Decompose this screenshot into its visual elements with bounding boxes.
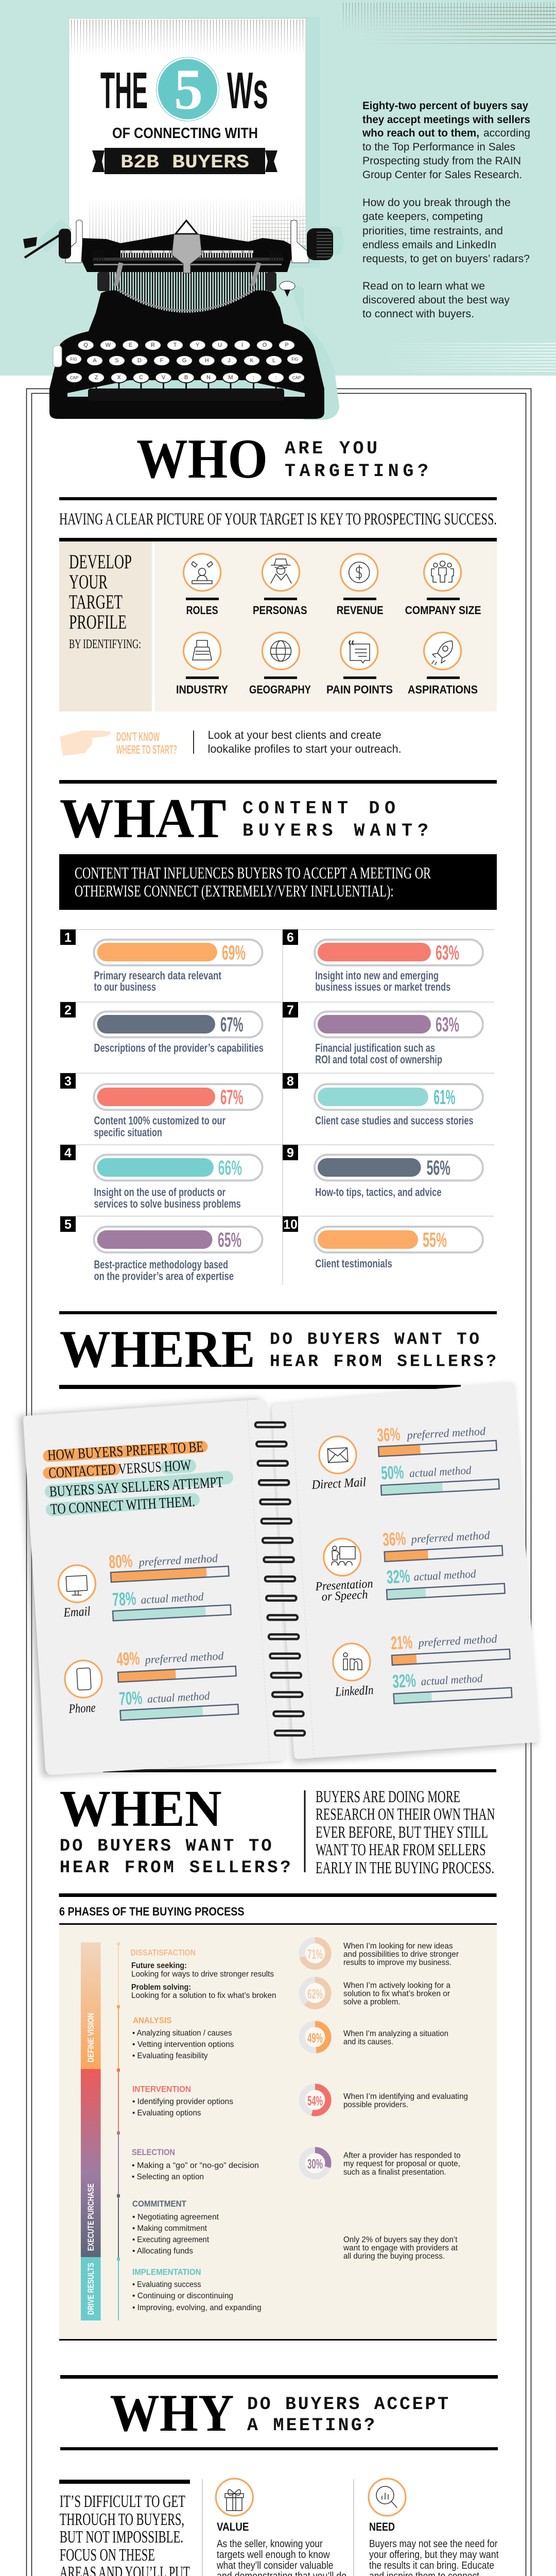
- icon: aspirations: [424, 633, 461, 670]
- statement text: FOCUS ON THESE: [60, 2546, 155, 2565]
- phase: dissatisfaction: Future seeking:: [131, 1961, 187, 1970]
- title ribbon: B2B buyers: [92, 148, 277, 174]
- item 9: 9: [287, 1146, 294, 1160]
- stage band: execute purchase: EXECUTE PURCHASE: [86, 2183, 96, 2251]
- method: direct mail: actual method: [409, 1464, 472, 1480]
- item 1: to our business: [94, 980, 156, 993]
- donut text: 54%: When I’m identifying and evaluating: [343, 2092, 468, 2101]
- donut: 54%: 54%: [307, 2093, 323, 2108]
- typewriter keys row 3: X: [117, 375, 121, 381]
- phase: intervention: [132, 2085, 233, 2117]
- panel: develop your target profile: TARGET: [69, 591, 123, 613]
- phase: dissatisfaction: [131, 1948, 276, 2000]
- donut: 30%: 30%: [307, 2156, 323, 2172]
- spiral binding: [255, 1422, 305, 1735]
- donut: 49%: [302, 2024, 328, 2050]
- icon: monitor: [66, 1575, 88, 1595]
- phase: implementation: IMPLEMENTATION: [132, 2268, 201, 2277]
- panel: develop your target profile: DEVELOP: [69, 551, 132, 573]
- typewriter keys row 1: T: [173, 342, 177, 348]
- callout heading: don't know where to start: DON'T KNOW: [116, 730, 160, 744]
- item 4: 4: [64, 1146, 72, 1160]
- item 2: 2: [64, 1003, 72, 1018]
- typewriter keys row 1: I: [241, 342, 243, 348]
- method: phone: Phone: [68, 1701, 96, 1716]
- typewriter keys row 2: F: [160, 358, 164, 364]
- title: number 5 in oval: 5: [174, 58, 203, 122]
- typewriter keys row 2: L: [272, 358, 275, 364]
- item 8: Client case studies and success stories: [315, 1114, 474, 1127]
- method: presentation or speech: actual method: [413, 1567, 477, 1583]
- donut: 49%: 49%: [307, 2030, 323, 2045]
- method: linkedin: actual method: [421, 1672, 483, 1688]
- phase: selection: • Making a “go” or “no-go” decision: [132, 2161, 259, 2170]
- intro statement: BUYERS ARE DOING MORE: [316, 1788, 460, 1806]
- typewriter keys row 3: N: [206, 375, 211, 381]
- method: direct mail: 36%: [376, 1423, 401, 1446]
- typewriter illustration: [23, 219, 344, 420]
- header hatching top right: [342, 3, 556, 374]
- reason: need: your offering, but they may want: [369, 2549, 499, 2561]
- label: geography: GEOGRAPHY: [249, 683, 311, 696]
- typewriter keys row 1: U: [218, 342, 222, 348]
- intro text: How do you break through the: [362, 196, 511, 209]
- typewriter paper with title: THE: [100, 62, 148, 120]
- note: only 2%: all during the buying process.: [343, 2252, 445, 2261]
- donut text: 62%: solution to fix what’s broken or: [343, 1990, 450, 1998]
- phase: commitment: • Negotiating agreement: [132, 2213, 219, 2222]
- typewriter keys row 1: O: [263, 342, 267, 348]
- heading: WHERE: WHERE: [60, 1320, 255, 1379]
- subheading: content do buyers want: CONTENT DO: [242, 799, 395, 819]
- callout text: [208, 728, 402, 755]
- notebook headline with highlights: CONTACTED VERSUS HOW: [48, 1457, 192, 1481]
- reason: need: Buyers may not see the need for: [369, 2538, 498, 2550]
- phase: commitment: • Allocating funds: [132, 2247, 193, 2256]
- item 5: Best-practice methodology based: [94, 1258, 228, 1271]
- method: presentation or speech: 36%: [382, 1528, 406, 1550]
- icon: magnifier: [376, 2486, 397, 2507]
- item 5: [60, 1216, 263, 1282]
- item 2: 67%: [220, 1013, 243, 1036]
- item 3: 3: [64, 1074, 72, 1089]
- phase: intervention: • Evaluating options: [132, 2109, 201, 2117]
- method: phone: 49%: [116, 1648, 140, 1670]
- donut text: 62%: When I’m actively looking for a: [343, 1981, 450, 1990]
- intro text: priorities, time restraints, and: [362, 225, 503, 237]
- frame border: [27, 388, 531, 2576]
- item 4: [60, 1145, 263, 1210]
- phase: analysis: ANALYSIS: [133, 2016, 171, 2025]
- icon: revenue: [341, 554, 378, 591]
- typewriter keys row 1: [78, 340, 295, 350]
- stage band: execute purchase: [81, 2069, 101, 2257]
- donut text: 49%: and its causes.: [343, 2038, 393, 2046]
- typewriter keys row 3: :: [275, 375, 277, 381]
- subheading: do buyers want to hear from sellers: DO BUYERS WANT TO: [270, 1330, 479, 1349]
- icon: gift: [225, 2489, 244, 2511]
- item 3: 67%: [220, 1086, 243, 1109]
- phase: commitment: COMMITMENT: [132, 2199, 186, 2209]
- item 4: services to solve business problems: [94, 1197, 241, 1210]
- reason: value: [216, 2479, 346, 2576]
- method: presentation or speech: 32%: [386, 1565, 410, 1587]
- typewriter keys row 3: Z: [95, 375, 98, 381]
- notebook headline with highlights: [47, 1438, 227, 1518]
- stage band: drive results: [81, 2257, 101, 2320]
- method: linkedin: preferred method: [417, 1632, 498, 1649]
- phase: commitment: [132, 2199, 219, 2256]
- item 8: 61%: [433, 1086, 455, 1109]
- donut text: 49%: When I’m analyzing a situation: [343, 2029, 448, 2038]
- subheading: do buyers want to hear from sellers: [60, 1837, 291, 1878]
- intro text: discovered about the best way: [362, 294, 510, 306]
- typewriter keys row 2: G: [182, 358, 186, 364]
- typewriter keys row 2: D: [137, 358, 142, 364]
- label: personas: PERSONAS: [253, 604, 307, 617]
- background: header teal: [0, 0, 556, 376]
- intro text: requests, to get on buyers’ radars?: [362, 252, 530, 265]
- donut text: 30%: [343, 2151, 461, 2177]
- icon: personas: [263, 554, 300, 591]
- reason: value: As the seller, knowing your: [217, 2538, 323, 2550]
- callout heading: don't know where to start: WHERE TO START?: [116, 743, 177, 757]
- intro text: endless emails and LinkedIn: [362, 239, 496, 251]
- icon: industry: [184, 633, 221, 670]
- notebook headline with highlights: BUYERS SAY SELLERS ATTEMPT: [49, 1474, 224, 1500]
- phase: commitment: • Executing agreement: [132, 2235, 210, 2244]
- statement text: BUT NOT IMPOSSIBLE.: [60, 2528, 183, 2547]
- typewriter keys row 2: FIG: [291, 357, 299, 362]
- callout heading: don't know where to start: [116, 730, 177, 757]
- method: email: 80%: [108, 1550, 133, 1572]
- subheading: do buyers accept a meeting: A MEETING?: [247, 2415, 375, 2436]
- item 9: How-to tips, tactics, and advice: [315, 1186, 442, 1199]
- typewriter keys row 2: FIG: [70, 357, 77, 362]
- panel: develop your target profile: PROFILE: [69, 611, 127, 633]
- notebook: [19, 1382, 539, 1776]
- typewriter keys row 1: Y: [196, 342, 200, 348]
- donut text: 30%: After a provider has responded to: [343, 2151, 461, 2160]
- icon: in logo: [343, 1653, 362, 1670]
- panel: develop your target profile: BY IDENTIFYING:: [69, 637, 141, 651]
- intro text: Read on to learn what we: [362, 280, 485, 292]
- intro text: who reach out to them,: [362, 127, 479, 139]
- typewriter keys row 3: M: [228, 375, 233, 381]
- typewriter keys row 3: ;: [253, 375, 254, 381]
- donut text: 30%: my request for proposal or quote,: [343, 2160, 460, 2168]
- icon: roles: [184, 554, 221, 591]
- icon: pain points: [341, 633, 378, 670]
- typewriter keys row 2: [65, 354, 303, 366]
- donut: 71%: 71%: [307, 1946, 323, 1962]
- method: linkedin: LinkedIn: [335, 1683, 374, 1699]
- panel: develop your target profile: [59, 541, 497, 711]
- callout text: Look at your best clients and create: [208, 728, 381, 741]
- item 7: [283, 1002, 483, 1066]
- donut: 54%: [302, 2087, 328, 2113]
- donut: 62%: 62%: [307, 1986, 323, 2002]
- subheading: are you targeting: TARGETING?: [285, 461, 428, 482]
- typewriter scale numbers: 00 10 20 30 40 50 60: [123, 249, 251, 255]
- icon: geography: [263, 633, 300, 670]
- donut: 62%: [302, 1980, 328, 2006]
- method: presentation or speech: or Speech: [321, 1588, 368, 1604]
- black banner: OTHERWISE CONNECT (EXTREMELY/VERY INFLUENTIAL):: [75, 882, 394, 900]
- typewriter keys row 1: Q: [83, 342, 88, 348]
- typewriter keys row 3: [66, 372, 305, 388]
- donut text: 62%: [343, 1981, 450, 2007]
- method: direct mail: Direct Mail: [311, 1476, 367, 1492]
- subheading: do buyers want to hear from sellers: HEAR FROM SELLERS?: [60, 1858, 291, 1878]
- intro text: Eighty-two percent of buyers say: [362, 99, 528, 112]
- item 6: business issues or market trends: [315, 980, 450, 993]
- note: only 2%: want to engage with providers at: [343, 2244, 458, 2252]
- heading: WHAT: WHAT: [60, 787, 227, 850]
- subheading: do buyers want to hear from sellers: [270, 1330, 496, 1371]
- subheading: are you targeting: [285, 438, 428, 482]
- method: email: preferred method: [137, 1552, 219, 1569]
- label: roles: ROLES: [186, 604, 218, 617]
- WHEN section: [59, 1780, 497, 2341]
- item 10: Client testimonials: [315, 1257, 392, 1270]
- phases heading: 6 PHASES OF THE BUYING PROCESS: [59, 1905, 245, 1918]
- subheading: content do buyers want: BUYERS WANT?: [242, 821, 428, 841]
- reason: need: [369, 2479, 499, 2576]
- method: presentation or speech: preferred method: [410, 1529, 491, 1546]
- phase: analysis: [132, 2016, 234, 2060]
- item 9: 56%: [427, 1157, 450, 1179]
- item 5: on the provider’s area of expertise: [94, 1269, 234, 1282]
- item 1: 1: [64, 930, 72, 945]
- item 1: Primary research data relevant: [94, 969, 222, 982]
- item 8: 8: [287, 1074, 294, 1089]
- label: pain points: PAIN POINTS: [326, 683, 393, 696]
- method: phone: preferred method: [144, 1649, 224, 1666]
- item 2: Descriptions of the provider’s capabilities: [94, 1042, 264, 1055]
- method: email: actual method: [141, 1590, 204, 1606]
- item 6: 63%: [436, 942, 459, 964]
- donut text: 71%: [343, 1942, 459, 1967]
- donut text: 54%: [343, 2092, 468, 2109]
- subheading: content do buyers want: [242, 799, 428, 841]
- title ribbon: B2B buyers: B2B BUYERS: [120, 152, 249, 174]
- phase: intervention: INTERVENTION: [132, 2085, 191, 2094]
- item 7: Financial justification such as: [315, 1042, 435, 1055]
- black banner: [59, 854, 497, 910]
- WHAT section: [59, 787, 497, 1314]
- phase: implementation: • Continuing or discontinuing: [132, 2292, 233, 2300]
- title: of connecting with: OF CONNECTING WITH: [112, 125, 258, 142]
- method: email: Email: [63, 1604, 91, 1620]
- donut text: 49%: [343, 2029, 448, 2046]
- intro text: to the Top Performance in Sales: [362, 141, 515, 153]
- donut text: 62%: solve a problem.: [343, 1998, 401, 2007]
- method: linkedin: 21%: [390, 1631, 413, 1653]
- reason: value: what they’ll consider valuable: [216, 2560, 334, 2571]
- phase: implementation: • Improving, evolving, and expanding: [132, 2303, 262, 2312]
- subheading: do buyers accept a meeting: DO BUYERS ACCEPT: [247, 2394, 448, 2415]
- typewriter keys row 3: CAP: [70, 376, 78, 380]
- phase: dissatisfaction: Looking for ways to drive stronger results: [131, 1970, 274, 1978]
- intro text: [362, 99, 530, 320]
- phase: commitment: • Making commitment: [132, 2224, 207, 2233]
- stage band: define vision: [81, 1942, 101, 2069]
- icon: presenter: [332, 1546, 355, 1565]
- phase: dissatisfaction: Problem solving:: [131, 1983, 191, 1992]
- panel: develop your target profile: YOUR: [69, 571, 108, 593]
- icon: company size: [424, 554, 461, 591]
- timeline: [117, 1942, 120, 2320]
- icon: pointing hand: [60, 731, 111, 756]
- method: presentation or speech: Presentation: [315, 1577, 373, 1594]
- label: revenue: REVENUE: [337, 604, 384, 617]
- phase: dissatisfaction: Looking for a solution to fix what’s broken: [131, 1991, 276, 2000]
- item 9: [283, 1145, 483, 1199]
- method: linkedin: 32%: [392, 1670, 416, 1692]
- item 7: 7: [287, 1003, 294, 1018]
- method: email: [59, 1550, 231, 1621]
- reason: value: targets well enough to know: [217, 2549, 330, 2561]
- intro statement: [316, 1788, 495, 1877]
- item 3: specific situation: [94, 1126, 162, 1139]
- icon: envelope: [327, 1448, 348, 1463]
- donut text: 71%: When I’m looking for new ideas: [343, 1942, 453, 1951]
- phase: selection: • Selecting an option: [132, 2173, 204, 2181]
- item 7: 63%: [436, 1013, 459, 1036]
- phase: selection: [132, 2148, 259, 2181]
- reason: need: the results it can bring. Educate: [369, 2560, 494, 2571]
- method: linkedin: [333, 1631, 512, 1704]
- typewriter keys row 3: B: [184, 375, 188, 381]
- note: only 2%: [343, 2235, 458, 2261]
- donut: 30%: [302, 2150, 328, 2176]
- item 4: Insight on the use of products or: [94, 1186, 225, 1199]
- typewriter keys row 2: K: [250, 358, 254, 364]
- WHERE heading group: [59, 1320, 496, 1772]
- title: number 5 in oval: [157, 57, 219, 122]
- item 2: [60, 1002, 264, 1055]
- subheading: do buyers want to hear from sellers: DO BUYERS WANT TO: [60, 1837, 272, 1856]
- typewriter keys row 3: V: [162, 375, 166, 381]
- item 4: 66%: [218, 1157, 242, 1179]
- intro text: Prospecting study from the RAIN: [362, 155, 521, 167]
- method: phone: [65, 1648, 238, 1720]
- typewriter keys row 2: J: [228, 358, 231, 364]
- item 1: 69%: [222, 942, 246, 964]
- heading: WHY: WHY: [110, 2384, 234, 2443]
- notebook headline with highlights: TO CONNECT WITH THEM.: [50, 1493, 195, 1518]
- icon: smartphone: [77, 1668, 91, 1690]
- typewriter keys row 1: P: [285, 342, 289, 348]
- phase: selection: SELECTION: [132, 2148, 175, 2157]
- phase: intervention: • Identifying provider options: [132, 2097, 233, 2106]
- item 8: [283, 1073, 483, 1127]
- method: phone: 70%: [118, 1687, 143, 1709]
- statement text: [60, 2492, 190, 2576]
- donut text: 30%: such as a finalist presentation.: [343, 2168, 446, 2177]
- stage band: define vision: DEFINE VISION: [86, 2013, 96, 2062]
- WHO section: [59, 428, 497, 784]
- item 7: ROI and total cost of ownership: [315, 1053, 442, 1066]
- WHY section: [59, 2375, 498, 2576]
- subheading: are you targeting: ARE YOU: [285, 438, 377, 459]
- donut text: 71%: and possibilities to drive stronger: [343, 1950, 459, 1959]
- heading: WHEN: WHEN: [60, 1780, 222, 1837]
- statement text: IT’S DIFFICULT TO GET: [60, 2492, 185, 2511]
- item 10: 55%: [423, 1229, 447, 1251]
- donut text: 71%: results to improve my business.: [343, 1958, 451, 1967]
- method: direct mail: 50%: [380, 1461, 404, 1483]
- typewriter keys row 1: R: [151, 342, 155, 348]
- item 5: 5: [64, 1217, 72, 1232]
- reason: value: VALUE: [217, 2520, 249, 2533]
- typewriter keys row 2: S: [115, 358, 119, 364]
- heading: WHO: WHO: [136, 428, 268, 490]
- intro text: Group Center for Sales Research.: [362, 168, 522, 181]
- intro text: they accept meetings with sellers: [362, 113, 530, 126]
- intro text: gate keepers, competing: [362, 210, 483, 223]
- typewriter keys row 3: C: [139, 375, 143, 381]
- reason: need: NEED: [369, 2520, 395, 2533]
- phase: analysis: • Vetting intervention options: [132, 2040, 234, 2049]
- method: email: 78%: [112, 1588, 136, 1610]
- method: direct mail: [311, 1423, 499, 1495]
- method: direct mail: preferred method: [406, 1425, 486, 1442]
- typewriter keys row 3: CAP: [292, 376, 301, 380]
- typewriter keys row 2: A: [93, 358, 97, 364]
- phase: dissatisfaction: DISSATISFACTION: [131, 1948, 196, 1958]
- phase: implementation: [132, 2268, 262, 2312]
- label: aspirations: ASPIRATIONS: [408, 683, 478, 696]
- typewriter keys row 2: H: [205, 358, 209, 364]
- intro text: according: [483, 127, 530, 139]
- item 10: [283, 1216, 483, 1270]
- label: company size: COMPANY SIZE: [405, 604, 481, 617]
- title: Ws: Ws: [227, 62, 268, 120]
- method: phone: actual method: [147, 1689, 211, 1705]
- phase: analysis: • Analyzing situation / causes: [132, 2029, 232, 2038]
- notebook headline with highlights: HOW BUYERS PREFER TO BE: [47, 1438, 204, 1464]
- item 3: Content 100% customized to our: [94, 1114, 225, 1127]
- typewriter keys row 1: E: [129, 342, 132, 348]
- item 6: Insight into new and emerging: [315, 969, 439, 982]
- donut text: 54%: possible providers.: [343, 2100, 408, 2109]
- label: industry: INDUSTRY: [176, 683, 228, 696]
- method: presentation or speech: [315, 1528, 505, 1604]
- item 6: [283, 929, 483, 993]
- intro text: to connect with buyers.: [362, 308, 474, 320]
- panel: buying process: [59, 1925, 497, 2339]
- callout text: lookalike profiles to start your outreach.: [208, 742, 402, 755]
- item 10: 10: [283, 1217, 298, 1232]
- subheading: do buyers want to hear from sellers: HEAR FROM SELLERS?: [270, 1352, 496, 1371]
- stage band: drive results: DRIVE RESULTS: [86, 2263, 96, 2315]
- phase: implementation: • Evaluating success: [132, 2280, 201, 2289]
- item 5: 65%: [218, 1229, 241, 1251]
- donut: 71%: [302, 1940, 328, 1967]
- item 6: 6: [287, 930, 294, 945]
- phase: analysis: • Evaluating feasibility: [132, 2052, 208, 2060]
- subheading: do buyers accept a meeting: [247, 2394, 448, 2436]
- typewriter paper with title: [69, 17, 320, 268]
- note: only 2%: Only 2% of buyers say they don’t: [343, 2235, 458, 2244]
- item 3: [60, 1073, 263, 1139]
- statement text: THROUGH TO BUYERS,: [60, 2510, 184, 2529]
- item 1: [60, 929, 263, 993]
- typewriter keys row 1: W: [106, 342, 111, 348]
